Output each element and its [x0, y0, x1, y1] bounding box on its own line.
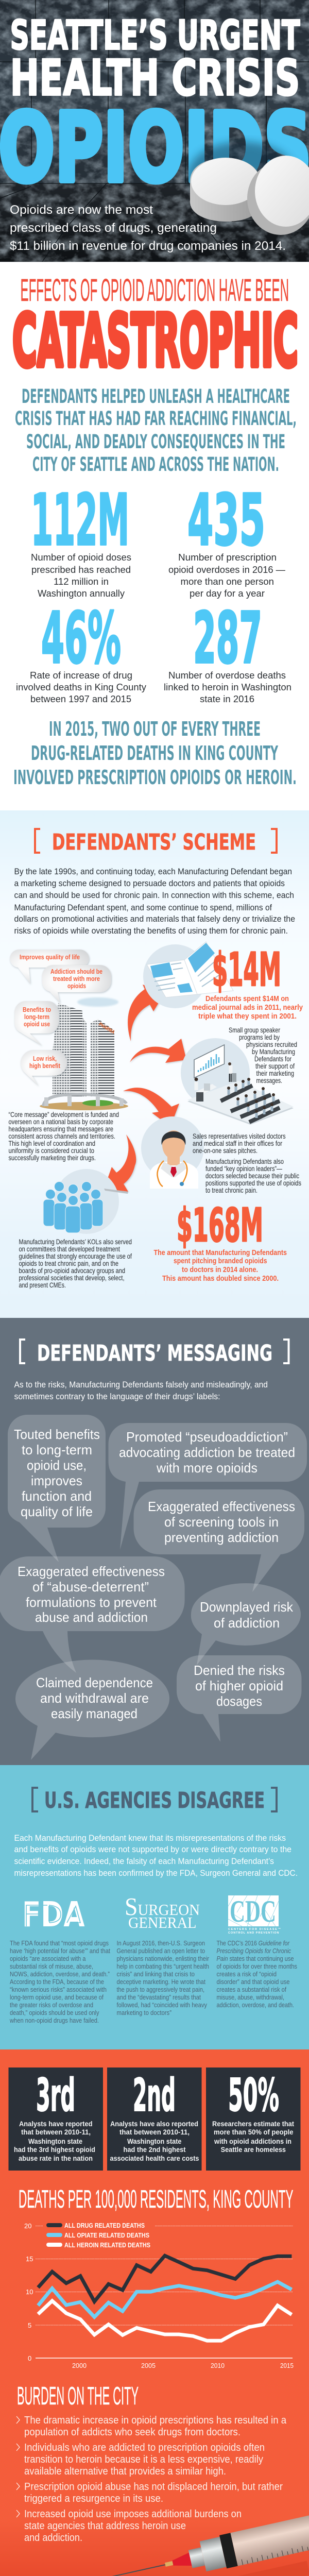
speech bubble: addiction should be treated: treated with more — [53, 975, 100, 982]
speech bubble: higher dosages: of higher opioid — [195, 1678, 283, 1693]
series: all drug related deaths — [38, 2256, 291, 2301]
text: KOL committees: boards of pro-opioid advocacy groups and — [19, 1266, 125, 1275]
logo: CDC: CDC — [230, 1894, 276, 1928]
x axis labels: 2000 — [72, 2362, 87, 2369]
bullet list: burden on the city: population of addicts who seek drugs from doctors. — [24, 2427, 241, 2438]
agencies introduction: Each Manufacturing Defendant knew that its misrepresentations of the risks — [14, 1833, 286, 1843]
y axis labels: 5 — [28, 2321, 31, 2329]
text: Surgeon General letter: and the “devastating” results that — [116, 1993, 201, 2001]
text: Surgeon General letter: General published an open letter to — [116, 1947, 205, 1955]
speech bubble: touted benefits — [8, 1415, 106, 1562]
scheme introduction: can and should be used for chronic pain. In connection with this scheme, each — [14, 890, 294, 900]
text: key opinion leaders: funded “key opinion leaders”— — [205, 1164, 282, 1173]
stat: 112M: prescribed has reached — [31, 565, 131, 575]
agencies introduction: scientific evidence. Indeed, the falsity of each Manufacturing Defendant’s — [14, 1856, 274, 1866]
stat card: 50%: more than 50% of people — [214, 2128, 294, 2136]
stat: 112M: Washington annually — [38, 588, 125, 599]
stat card: 3rd — [8, 2067, 103, 2171]
panel: rankings, chart and burden — [0, 2049, 309, 2576]
text: FDA findings: The FDA found that “most opioid drugs — [10, 1939, 109, 1947]
agencies introduction — [14, 1833, 298, 1878]
caption: journal ad spend: Defendants spent $14M on — [205, 994, 289, 1003]
text: CDC guideline: disorder” and that opioid use — [216, 1978, 289, 1986]
text: KOL committees: on committees that developed treatment — [19, 1245, 120, 1253]
text: speaker programs: physicians recruited — [246, 1040, 297, 1048]
stat: 112M: Number of opioid doses — [31, 552, 131, 563]
text: speaker programs: by Manufacturing — [252, 1047, 295, 1056]
arrow: to key opinion leaders — [104, 1134, 136, 1192]
stat card: 2nd — [107, 2067, 202, 2171]
icon: medical journal — [143, 942, 233, 1008]
logo: Surgeon General: GENERAL — [128, 1913, 197, 1931]
text: KOL committees — [19, 1238, 132, 1289]
text: CDC guideline: The CDC’s 2016 Guideline for — [216, 1939, 290, 1947]
bullet list: burden on the city: transition to heroin because it is a less expensive, readily — [24, 2454, 263, 2465]
speech bubble: abuse-deterrent: of “abuse-deterrent” — [32, 1579, 149, 1595]
speech bubble: screening tools — [134, 1489, 304, 1592]
stat: 435: per day for a year — [190, 588, 265, 599]
panel: defendants' messaging — [0, 1318, 309, 1765]
x axis labels: 2015 — [280, 2362, 294, 2369]
caption: pitching spend: spent pitching branded opioids — [174, 1257, 267, 1265]
text: FDA findings: “known serious risks” associated with — [10, 1986, 107, 1993]
logo: CDC: CENTERS FOR DISEASE™ — [228, 1928, 281, 1931]
scheme introduction: dollars on promotional activities and materials that falsely deny or trivialize the — [14, 914, 295, 924]
stat card: 2nd: 2nd — [133, 2069, 176, 2122]
statement: two out of three — [13, 718, 297, 789]
x axis labels — [72, 2362, 294, 2369]
icon: doctor — [141, 1116, 204, 1189]
speech bubble: addiction should be treated — [42, 965, 111, 1003]
text: FDA findings: NOWS, addiction, overdose, and death.” — [10, 1970, 110, 1978]
speech bubble: benefits to long-term use: long-term — [24, 1013, 49, 1021]
stat card: 3rd: Washington state — [28, 2137, 82, 2145]
statement — [15, 385, 297, 476]
arrow: to sales representative — [123, 1088, 179, 1127]
panel: U.S. agencies disagree — [0, 1765, 309, 2049]
logo: FDA: FDA — [22, 1894, 85, 1935]
x axis labels: 2010 — [211, 2362, 225, 2369]
icon: speaker program room — [181, 1038, 294, 1125]
stat card: 3rd: Analysts have reported — [19, 2120, 93, 2128]
speech bubble: improves quality of life — [10, 950, 89, 984]
text: Surgeon General letter: In August 2016, then-U.S. Surgeon — [116, 1939, 205, 1947]
logo: CDC — [228, 1894, 281, 1935]
text: sales representatives — [193, 1132, 285, 1155]
text: FDA findings — [9, 1939, 110, 2024]
text: FDA findings: opioids “are associated with a — [10, 1955, 86, 1962]
stat card: 2nd: associated health care costs — [110, 2154, 199, 2162]
stat card: 3rd: abuse rate in the nation — [19, 2154, 93, 2162]
scheme introduction: Manufacturing Defendant spent, and some continue to spend, millions of — [14, 903, 272, 912]
series: all opiate related deaths — [38, 2282, 291, 2317]
text: sales representatives: one-on-one sales pitches. — [193, 1146, 258, 1155]
speech bubble: abuse-deterrent: formulations to prevent — [26, 1595, 157, 1610]
text: core message: headquarters ensuring that messages are — [8, 1125, 113, 1133]
stat card: 50%: with opioid addictions in — [214, 2137, 291, 2145]
stat: 46%: Rate of increase of drug — [30, 670, 132, 681]
text: sales representatives: and medical staff in their offices for — [193, 1139, 282, 1147]
messaging introduction: sometimes contrary to the language of their drugs’ labels: — [14, 1392, 220, 1401]
text: FDA findings: have ‘high potential for abuse’” and that — [10, 1947, 110, 1955]
y axis labels: 10 — [26, 2288, 33, 2296]
icon: group of people — [43, 1169, 128, 1234]
bullet list: burden on the city: state agencies that address heroin use — [24, 2520, 186, 2532]
panel: rankings, chart and burden: BURDEN ON THE CITY — [17, 2382, 139, 2410]
text: KOL committees: professional societies that develop, select, — [19, 1274, 125, 1282]
intro text — [10, 203, 286, 253]
text: Surgeon General letter: marketing to doctors” — [116, 2009, 171, 2016]
bullet list: burden on the city — [16, 2415, 287, 2544]
stat: 46% — [16, 598, 146, 704]
stat card: 50%: Researchers estimate that — [212, 2120, 294, 2128]
stat: 112M: 112 million in — [54, 577, 109, 587]
agencies introduction: and benefits of opioids were not supported by or were directly contrary to the — [14, 1844, 291, 1854]
icon: pharma building — [40, 997, 128, 1110]
messaging introduction: As to the risks, Manufacturing Defendants falsely and misleadingly, and — [14, 1380, 268, 1389]
speech bubble: touted benefits: opioid use, — [27, 1458, 87, 1473]
icon: syringe — [104, 2515, 309, 2576]
stat: 46%: involved deaths in King County — [16, 682, 146, 692]
speech bubble: benefits to long-term use: opioid use — [24, 1020, 50, 1028]
bullet list: burden on the city: Increased opioid use imposes additional burdens on — [24, 2509, 242, 2520]
text: key opinion leaders — [205, 1157, 301, 1194]
chart legend: ALL OPIATE RELATED DEATHS — [64, 2231, 149, 2239]
speech bubble: benefits to long-term use: Benefits to — [23, 1006, 51, 1013]
panel: catastrophic effects and statistics — [0, 262, 309, 810]
text: core message: uniformity is considered crucial to — [8, 1146, 94, 1155]
messaging introduction — [14, 1380, 268, 1401]
icon: pharma building: PHARMA — [98, 1022, 115, 1036]
stat: 46%: between 1997 and 2015 — [30, 694, 131, 704]
caption: pitching spend: This amount has doubled since 2000. — [162, 1274, 279, 1283]
stat: 112M — [31, 480, 131, 599]
bullet list: burden on the city: and addiction. — [24, 2532, 82, 2544]
stat: 287 — [164, 598, 291, 704]
speech bubble: touted benefits: to long-term — [22, 1442, 92, 1458]
speech bubble: downplayed risk: of addiction — [214, 1615, 280, 1631]
speech bubble: screening tools: Exaggerated effectiveness — [148, 1499, 295, 1514]
stat card: 2nd: Washington state — [127, 2137, 182, 2145]
text: KOL committees: and present CMEs. — [19, 1281, 66, 1289]
caption: journal ad spend — [192, 994, 303, 1021]
bullet list: burden on the city: Individuals who are addicted to prescription opioids often — [24, 2442, 265, 2453]
logo: Surgeon General — [125, 1892, 200, 1931]
speech bubble: dependence and withdrawal — [15, 1660, 169, 1760]
text: speaker programs: their marketing — [256, 1069, 294, 1077]
speech bubble: downplayed risk: Downplayed risk — [200, 1599, 294, 1615]
scheme introduction: a marketing scheme designed to persuade doctors and patients that opioids — [14, 878, 285, 888]
stat: 287: Number of overdose deaths — [168, 670, 286, 681]
stat: 46%: 46% — [41, 598, 121, 680]
text: key opinion leaders: Manufacturing Defendants also — [205, 1157, 284, 1165]
stat card: 50%: Seattle are homeless — [221, 2145, 286, 2154]
speech bubble: touted benefits: Touted benefits — [14, 1427, 100, 1442]
bullet list: burden on the city: triggered a resurgence in its use. — [24, 2493, 163, 2504]
speech bubble: screening tools: of screening tools in — [164, 1514, 279, 1530]
caption: pitching spend — [153, 1248, 287, 1283]
speech bubble: higher dosages: dosages — [216, 1693, 262, 1709]
bullet list: burden on the city: available alternative that provides a similar high. — [24, 2466, 226, 2477]
text: Surgeon General letter: crisis” and linking that crisis to — [116, 1970, 195, 1978]
text: Surgeon General letter: physicians nationwide, enlisting their — [116, 1955, 210, 1962]
caption: pitching spend: The amount that Manufacturing Defendants — [153, 1248, 287, 1257]
text: CDC guideline: of opioids for over three months — [216, 1962, 297, 1970]
panel: hero header — [0, 0, 309, 263]
speech bubble: screening tools: preventing addiction — [164, 1530, 279, 1545]
intro text: Opioids are now the most — [10, 203, 153, 217]
intro text: $11 billion in revenue for drug companies in 2014. — [10, 239, 286, 253]
text: speaker programs: their support of — [255, 1062, 295, 1070]
speech bubble: low risk, high benefit: high benefit — [29, 1062, 61, 1070]
text: CDC guideline — [216, 1939, 297, 2009]
stat: 435: opioid overdoses in 2016 — — [168, 565, 285, 575]
panel: defendants' scheme — [0, 810, 309, 1318]
speech bubble: dependence and withdrawal: Claimed dependence — [36, 1675, 153, 1690]
text: speaker programs: Small group speaker — [229, 1026, 280, 1034]
text: FDA findings: death,” opioids should be used only — [10, 2009, 99, 2016]
logo: Surgeon General: SURGEON — [125, 1892, 200, 1921]
text: speaker programs: programs led by — [239, 1033, 280, 1041]
bullet list: burden on the city: The dramatic increase in opioid prescriptions has resulted in a — [24, 2415, 287, 2426]
text: speaker programs — [229, 1026, 297, 1084]
speech bubble: touted benefits: improves — [31, 1473, 82, 1488]
speech bubble: addiction should be treated: Addiction should be — [50, 968, 102, 975]
text: Surgeon General letter: followed, had “coincided with heavy — [116, 2001, 207, 2009]
caption: journal ad spend: triple what they spent in 2001. — [198, 1012, 297, 1021]
icon: pills — [188, 142, 309, 235]
text: FDA findings: the greater risks of overdose and — [10, 2001, 93, 2009]
y axis labels: 20 — [24, 2222, 31, 2230]
stat: 435: more than one person — [180, 577, 274, 587]
stat: 435 — [168, 480, 285, 599]
text: FDA findings: when non-opioid drugs have failed. — [9, 2016, 99, 2024]
text: Surgeon General letter: deceptive marketing. He wrote that — [116, 1978, 205, 1986]
y axis labels: 15 — [26, 2255, 33, 2263]
speech bubble: dependence and withdrawal: easily managed — [51, 1706, 138, 1721]
speech bubble: higher dosages — [177, 1655, 302, 1742]
bullet list: burden on the city: Prescription opioid abuse has not displaced heroin, but rather — [24, 2481, 283, 2493]
text: Surgeon General letter — [116, 1939, 210, 2016]
caption: pitching spend: to doctors in 2014 alone. — [182, 1265, 258, 1274]
text: sales representatives: Sales representatives visited doctors — [193, 1132, 285, 1140]
speech bubble: touted benefits: function and — [22, 1488, 92, 1504]
stat card: 2nd: Analysts have also reported — [110, 2120, 198, 2128]
text: Surgeon General letter: help in combating this “urgent health — [116, 1962, 209, 1970]
text: core message: overseen on a national basis by corporate — [8, 1117, 113, 1126]
stat card: 3rd: had the 3rd highest opioid — [14, 2145, 95, 2154]
speech bubble: abuse-deterrent: abuse and addiction — [35, 1609, 148, 1625]
chart legend: ALL DRUG RELATED DEATHS — [64, 2222, 145, 2229]
stat card: 50% — [206, 2067, 301, 2171]
speech bubble: pseudoaddiction: Promoted “pseudoaddiction” — [126, 1429, 288, 1445]
speech bubble: addiction should be treated: opioids — [67, 982, 86, 990]
speech bubble: improves quality of life: Improves quality of life — [20, 953, 80, 961]
text: speaker programs: Defendants for — [254, 1055, 291, 1063]
arrow: to speaker programs — [130, 1039, 186, 1063]
series: all heroin related deaths — [38, 2301, 291, 2341]
speech bubble: pseudoaddiction — [108, 1423, 307, 1550]
speech bubble: abuse-deterrent — [0, 1556, 185, 1673]
text: key opinion leaders: to treat chronic pain. — [205, 1186, 258, 1194]
text: CDC guideline: creates a risk of “opioid — [216, 1970, 277, 1978]
y axis labels: 0 — [28, 2354, 31, 2362]
speech bubble: downplayed risk — [191, 1583, 301, 1665]
speech bubble: abuse-deterrent: Exaggerated effectiveness — [18, 1564, 165, 1579]
stat: 287: linked to heroin in Washington — [164, 682, 291, 692]
text: KOL committees: guidelines that strongly encourage the use of — [19, 1252, 132, 1260]
speech bubble: low risk, high benefit: Low risk, — [33, 1055, 57, 1062]
speech bubble: higher dosages: Denied the risks — [194, 1663, 285, 1678]
text: Surgeon General letter: the push to aggressively treat pain, — [116, 1986, 204, 1993]
scheme introduction — [14, 867, 295, 936]
intro text: prescribed class of drugs, generating — [10, 221, 217, 235]
stat: 435: Number of prescription — [178, 552, 277, 563]
speech bubble: dependence and withdrawal: and withdrawal are — [40, 1690, 149, 1706]
text: CDC guideline: Prescribing Opioids for Chronic — [216, 1947, 291, 1955]
speech bubble: low risk, high benefit — [21, 1050, 67, 1086]
chart legend: ALL HEROIN RELATED DEATHS — [64, 2241, 150, 2249]
speech bubble: pseudoaddiction: advocating addiction be treated — [119, 1445, 295, 1460]
panel: catastrophic effects and statistics: 112M — [31, 480, 129, 562]
text: core message: consistent across channels and territories. — [8, 1132, 115, 1140]
stat card: 3rd: 3rd — [36, 2069, 75, 2122]
speech bubble: benefits to long-term use — [14, 1001, 59, 1046]
chart legend — [48, 2222, 150, 2249]
speech bubble: touted benefits: quality of life — [21, 1504, 93, 1519]
text: KOL committees: Manufacturing Defendants’ KOLs also served — [19, 1238, 132, 1246]
stat card: 2nd: had the 2nd highest — [124, 2145, 186, 2154]
arrow: to journal — [128, 985, 165, 1041]
stat card: 3rd: that between 2010-11, — [21, 2128, 91, 2136]
text: FDA findings: substantial risk of misuse, abuse, — [10, 1962, 93, 1970]
text: core message: successfully marketing their drugs. — [8, 1154, 96, 1162]
text: FDA findings: long-term opioid use, and because of — [10, 1993, 104, 2001]
text: KOL committees: opioids to treat chronic pain, and on the — [19, 1259, 118, 1267]
text: core message: This high level of coordination and — [8, 1139, 95, 1147]
text: core message: “Core message” development is funded and — [8, 1110, 119, 1118]
y axis labels — [24, 2222, 33, 2362]
scheme introduction: risks of opioids while overstating the benefits of using them for chronic pain. — [14, 926, 288, 936]
line chart: deaths per 100,000 — [24, 2222, 294, 2369]
text: speaker programs: messages. — [256, 1076, 282, 1084]
x axis labels: 2005 — [141, 2362, 156, 2369]
text: FDA findings: According to the FDA, because of the — [10, 1978, 104, 1986]
text: CDC guideline: Pain states that continuing use — [216, 1955, 294, 1962]
text: CDC guideline: creates a substantial risk of — [216, 1986, 286, 1993]
logo: CDC: CONTROL AND PREVENTION — [228, 1931, 279, 1935]
text: CDC guideline: addiction, overdose, and death. — [216, 2001, 294, 2009]
text: core message — [8, 1110, 119, 1162]
text: CDC guideline: misuse, abuse, withdrawal, — [216, 1993, 284, 2001]
stat: 287: state in 2016 — [200, 694, 254, 704]
speech bubble: pseudoaddiction: with more opioids — [156, 1460, 258, 1476]
stat card: 2nd: that between 2010-11, — [119, 2128, 190, 2136]
